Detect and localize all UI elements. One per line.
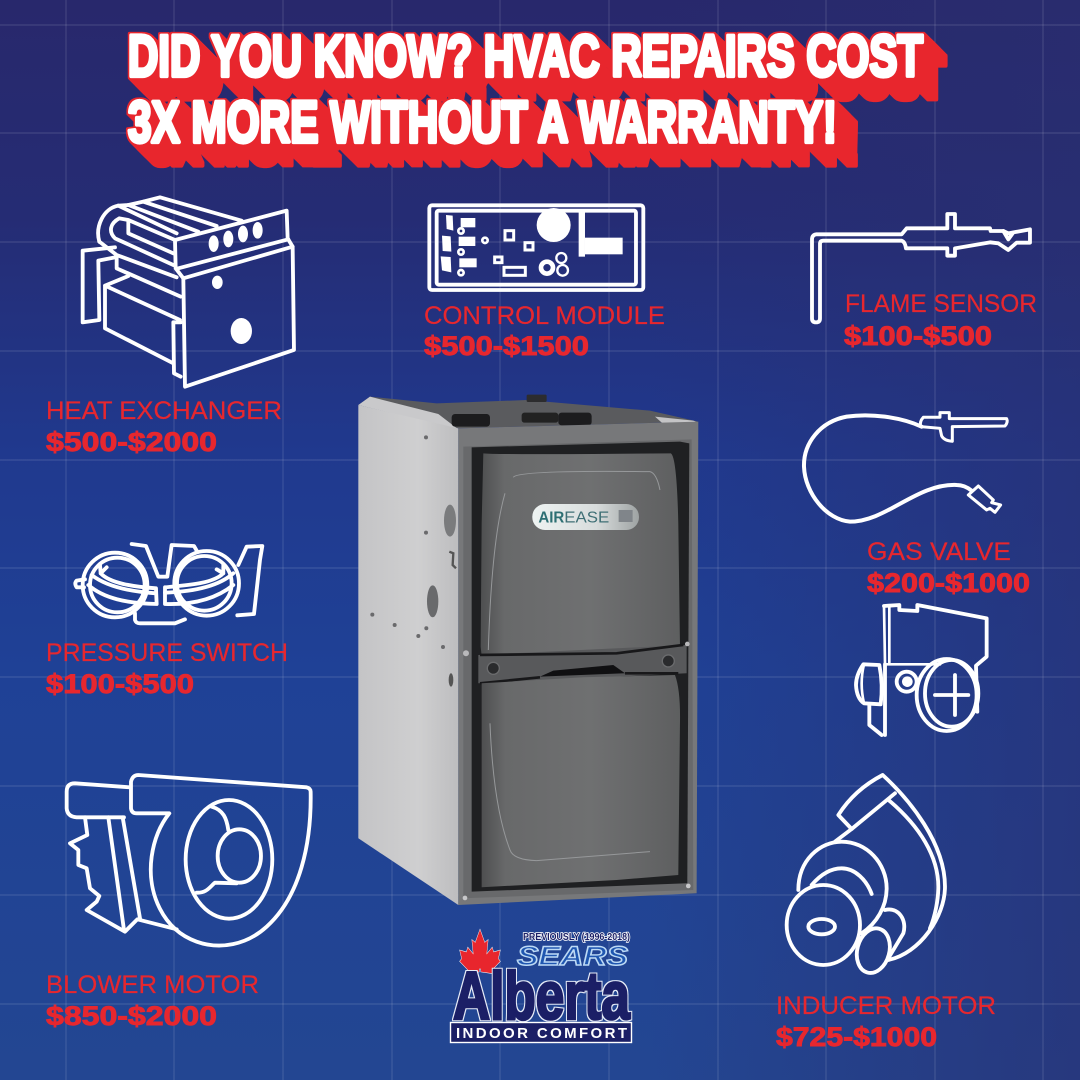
panel: flame sensor [812, 214, 1037, 351]
label: heat exchanger: HEAT EXCHANGER [46, 397, 282, 425]
Indoor Comfort bar: INDOOR COMFORT [456, 1025, 627, 1042]
furnace upper panel [481, 453, 680, 656]
panel: inducer motor [776, 775, 996, 1052]
furnace illustration [358, 395, 698, 905]
panel: gas valve [804, 413, 1030, 735]
panel: heat exchanger [46, 197, 294, 457]
furnace front frame [458, 422, 698, 905]
label: inducer motor: INDUCER MOTOR [776, 992, 996, 1020]
icon: maple leaf [460, 929, 500, 974]
label: gas valve: GAS VALVE [867, 538, 1011, 566]
furnace top [358, 397, 698, 428]
price: flame sensor: $100-$500 [844, 321, 992, 351]
icon: gas valve body [856, 605, 987, 735]
label: blower motor: BLOWER MOTOR [46, 971, 259, 999]
icon: inducer motor [787, 775, 945, 977]
icon: gas valve sensor wire [804, 413, 1007, 522]
title [128, 24, 923, 155]
label: flame sensor: FLAME SENSOR [845, 290, 1037, 318]
price: heat exchanger: $500-$2000 [46, 427, 217, 457]
panel: blower motor [46, 775, 311, 1031]
logo: Alberta Indoor Comfort [450, 929, 632, 1042]
icon: flame sensor [812, 214, 1030, 322]
brand badge: EASE [564, 510, 609, 527]
price: inducer motor: $725-$1000 [776, 1022, 937, 1052]
brand badge [532, 504, 639, 530]
price: gas valve: $200-$1000 [867, 568, 1030, 598]
furnace mid strip [478, 645, 687, 683]
label: pressure switch: PRESSURE SWITCH [46, 639, 288, 667]
previously text: PREVIOUSLY (1996-2018) [523, 932, 630, 943]
label: control module: CONTROL MODULE [424, 302, 665, 330]
Sears wordmark: SEARS [517, 941, 628, 971]
icon: control module [429, 205, 643, 290]
furnace lower panel [482, 675, 680, 887]
icon: heat exchanger [83, 197, 294, 387]
Alberta wordmark: Alberta [453, 958, 631, 1034]
brand badge: AIR [538, 510, 565, 527]
price: pressure switch: $100-$500 [46, 669, 194, 699]
furnace side [358, 405, 458, 905]
icon: blower motor [67, 775, 311, 946]
price: blower motor: $850-$2000 [46, 1001, 217, 1031]
price: control module: $500-$1500 [424, 331, 589, 361]
panel: control module [424, 205, 665, 361]
panel: pressure switch [46, 544, 288, 699]
icon: pressure switch [75, 544, 262, 623]
title: 3X MORE WITHOUT A WARRANTY! [128, 90, 837, 155]
